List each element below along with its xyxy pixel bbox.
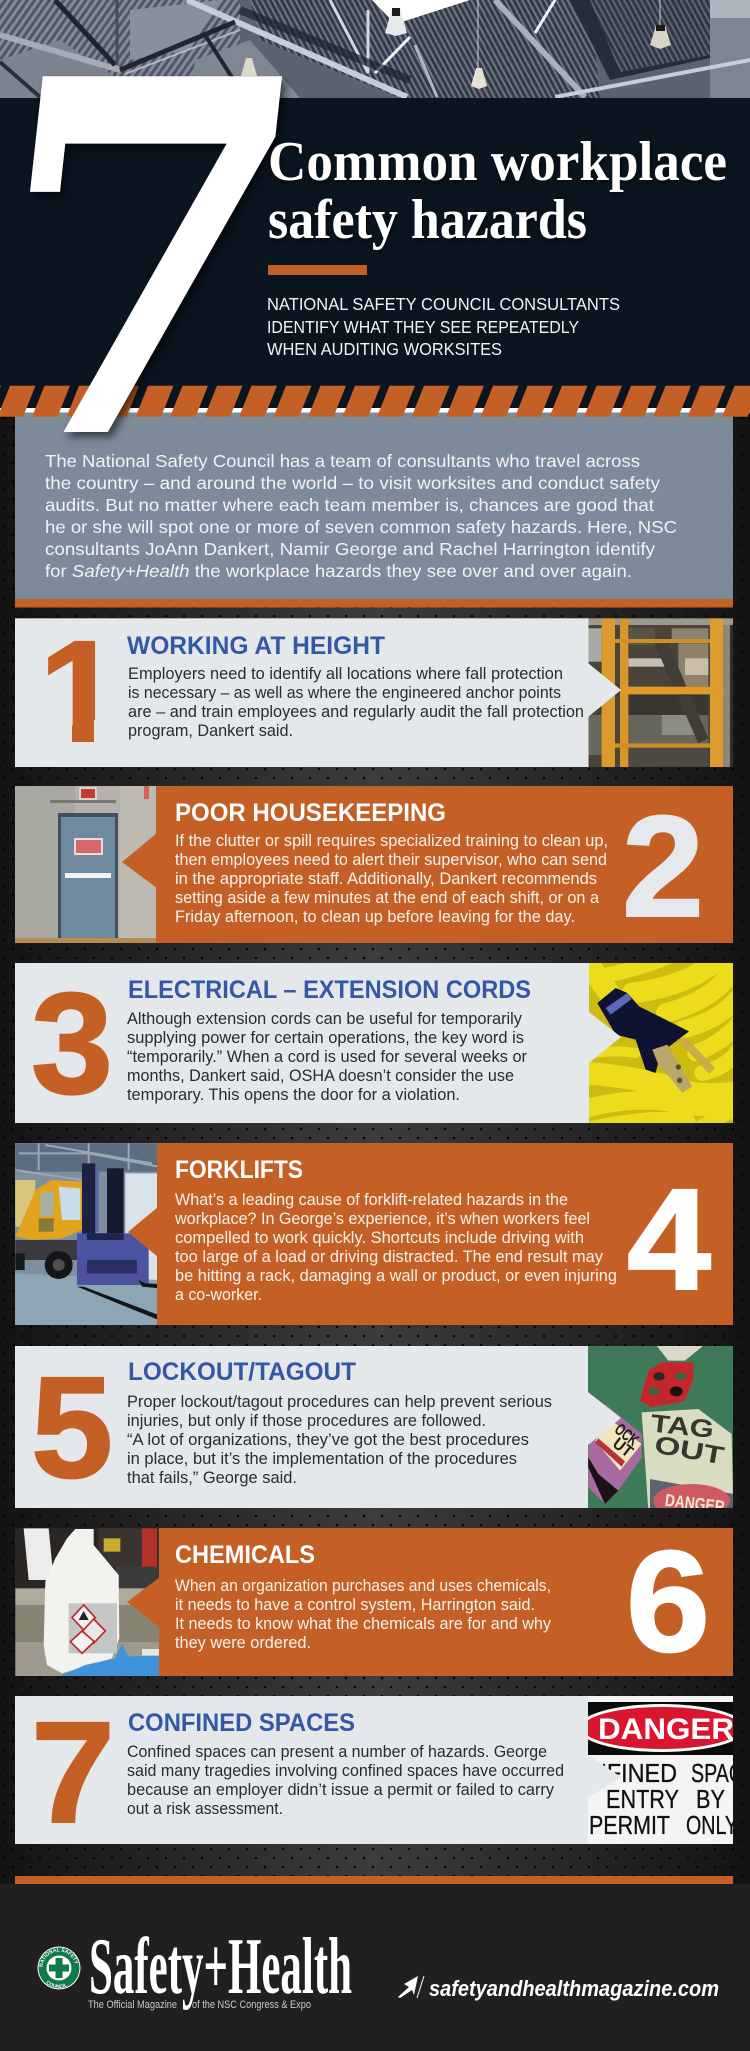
header photo: warehouse ceiling — [0, 0, 750, 98]
tagline: The Official Magazine — [88, 1999, 177, 2011]
numeral 7: 7 — [31, 1692, 115, 1853]
body: that fails,” George said. — [127, 1469, 297, 1487]
numeral 1 foot trim — [38, 720, 124, 746]
sign lines: PERMIT — [589, 1810, 670, 1840]
body: It needs to know what the chemicals are for and why — [175, 1615, 552, 1633]
intro text: The National Safety Council has a team of consultants who travel across — [45, 451, 640, 471]
body — [127, 1393, 552, 1487]
body: is necessary – as well as where the engineered anchor points — [128, 684, 561, 702]
sign lines — [590, 1764, 733, 1834]
body: Friday afternoon, to clean up before leaving for the day. — [175, 908, 575, 926]
hazard stripe divider — [0, 386, 750, 417]
body: in the appropriate staff. Additionally, Dankert recommends — [175, 870, 597, 888]
panel 6: chemicals — [12, 1521, 733, 1682]
panel 5: lockout/tagout — [15, 1344, 735, 1517]
body: in place, but it’s the implementation of the procedures — [127, 1450, 517, 1468]
photo: forklift — [12, 1140, 162, 1330]
intro text: for Safety+Health the workplace hazards they see over and over again. — [45, 561, 632, 581]
logo: NSC green cross seal: NATIONAL SAFETY — [39, 1948, 78, 1967]
numeral 5: 5 — [31, 1347, 113, 1508]
photo: chemical jug — [12, 1525, 162, 1680]
tagline: of the NSC Congress & Expo — [192, 1999, 311, 2011]
lock label: OCK — [611, 1420, 642, 1450]
heading: POOR HOUSEKEEPING — [175, 799, 446, 827]
title — [268, 131, 727, 251]
title: Common workplace — [268, 131, 727, 193]
intro text — [45, 451, 677, 581]
body — [175, 832, 608, 926]
tag lettering: OUT — [652, 1431, 726, 1470]
body: Employers need to identify all locations where fall protection — [128, 665, 563, 683]
numeral 1: 1 — [39, 611, 122, 772]
magazine wordmark: Safety+Health — [89, 1923, 352, 2011]
body — [127, 1743, 564, 1818]
arrow — [589, 1012, 621, 1063]
panel 4: forklifts — [12, 1140, 733, 1330]
body: “temporarily.” When a cord is used for several weeks or — [127, 1048, 527, 1066]
intro panel — [15, 412, 733, 608]
intro text: he or she will spot one or more of seven common safety hazards. Here, NSC — [45, 517, 677, 537]
body: compelled to work quickly. Shortcuts include driving with — [175, 1229, 584, 1247]
arrow — [128, 1207, 158, 1257]
intro text: consultants JoAnn Dankert, Namir George and Rachel Harrington identify — [45, 539, 655, 559]
logo: NSC green cross seal — [38, 1946, 80, 1990]
body: be hitting a rack, damaging a wall or product, or even injuring — [175, 1267, 617, 1285]
heading: CONFINED SPACES — [128, 1709, 355, 1737]
sign lines: NFINED — [590, 1758, 677, 1788]
body — [127, 1010, 527, 1104]
photo: lock and tag — [585, 1344, 735, 1517]
intro text: audits. But no matter where each team member is, chances are good that — [45, 495, 654, 515]
sign lines: ENTRY — [606, 1784, 679, 1814]
body: If the clutter or spill requires specialized training to clean up, — [175, 832, 608, 850]
panel 1: working at height — [15, 611, 735, 772]
arrow — [588, 663, 621, 717]
lock label: UT — [609, 1434, 637, 1461]
body: supplying power for certain operations, the key word is — [127, 1029, 524, 1047]
panel 3: electrical extension cords — [15, 956, 742, 1130]
body: a co-worker. — [175, 1286, 262, 1304]
tagline — [88, 1999, 311, 2011]
body: are – and train employees and regularly audit the fall protection — [128, 703, 584, 721]
body: it needs to have a control system, Harrington said. — [175, 1596, 535, 1614]
body: months, Dankert said, OSHA doesn’t consider the use — [127, 1067, 514, 1085]
panel 7: confined spaces — [15, 1692, 746, 1853]
subtitle — [267, 294, 620, 359]
body: temporary. This opens the door for a violation. — [127, 1086, 460, 1104]
body: “A lot of organizations, they’ve got the best procedures — [127, 1431, 529, 1449]
body: Proper lockout/tagout procedures can help prevent serious — [127, 1393, 552, 1411]
heading: WORKING AT HEIGHT — [127, 632, 385, 660]
photo: yellow ladder — [585, 615, 735, 770]
subtitle: IDENTIFY WHAT THEY SEE REPEATEDLY — [267, 317, 579, 337]
heading: ELECTRICAL – EXTENSION CORDS — [128, 976, 531, 1004]
footer band — [0, 1884, 750, 2051]
heading: FORKLIFTS — [175, 1156, 303, 1184]
body: because an employer didn’t issue a permit or failed to carry — [127, 1781, 555, 1799]
navy title band — [0, 98, 750, 413]
body: program, Dankert said. — [128, 722, 293, 740]
title: safety hazards — [268, 189, 587, 251]
numeral 2: 2 — [622, 786, 704, 947]
arrow — [127, 1577, 160, 1628]
body: Confined spaces can present a number of hazards. George — [127, 1743, 547, 1761]
subtitle: NATIONAL SAFETY COUNCIL CONSULTANTS — [267, 294, 620, 314]
panel 2: poor housekeeping — [15, 786, 733, 947]
logo: NSC green cross seal: COUNCIL — [46, 1981, 68, 1988]
sign word: DANGER — [598, 1713, 734, 1746]
body: workplace? In George’s experience, it’s when workers feel — [174, 1210, 590, 1228]
body: injuries, but only if those procedures are followed. — [127, 1412, 486, 1430]
tag danger lettering: DANGER — [664, 1490, 726, 1517]
heading: LOCKOUT/TAGOUT — [128, 1358, 356, 1386]
arrow — [122, 833, 157, 888]
photo: yellow cord and plug — [589, 963, 733, 1123]
subtitle: WHEN AUDITING WORKSITES — [267, 339, 502, 359]
arrow — [588, 1392, 621, 1445]
body — [174, 1191, 617, 1304]
intro text: the country – and around the world – to visit worksites and conduct safety — [45, 473, 660, 493]
body: What’s a leading cause of forklift-related hazards in the — [175, 1191, 568, 1209]
body: out a risk assessment. — [127, 1800, 283, 1818]
website url: safetyandhealthmagazine.com — [429, 1976, 719, 2001]
heading: CHEMICALS — [175, 1541, 315, 1569]
body: too large of a load or driving distracted. The end result may — [175, 1248, 604, 1266]
footer accent bar — [15, 1876, 733, 1884]
body: they were ordered. — [175, 1634, 311, 1652]
lock label — [614, 1424, 640, 1456]
perforated metal background — [0, 412, 750, 1884]
photo: exit door — [15, 786, 156, 943]
title accent bar — [268, 265, 367, 275]
numeral 6: 6 — [626, 1521, 710, 1682]
body — [128, 665, 584, 740]
body: said many tragedies involving confined spaces have occurred — [127, 1762, 564, 1780]
arrow — [588, 1755, 621, 1798]
body — [175, 1577, 552, 1652]
numeral 3: 3 — [31, 963, 113, 1124]
body: When an organization purchases and uses chemicals, — [175, 1577, 551, 1595]
photo: danger sign — [588, 1696, 733, 1844]
numeral 4: 4 — [627, 1159, 711, 1320]
body: setting aside a few minutes at the end of each shift, or on a — [175, 889, 600, 907]
icon: arrow cursor — [398, 1976, 424, 1998]
body: then employees need to alert their supervisor, who can send — [175, 851, 607, 869]
body: Although extension cords can be useful for temporarily — [127, 1010, 523, 1028]
sign lines: BY — [696, 1784, 725, 1814]
tag lettering: TAG — [649, 1409, 715, 1444]
